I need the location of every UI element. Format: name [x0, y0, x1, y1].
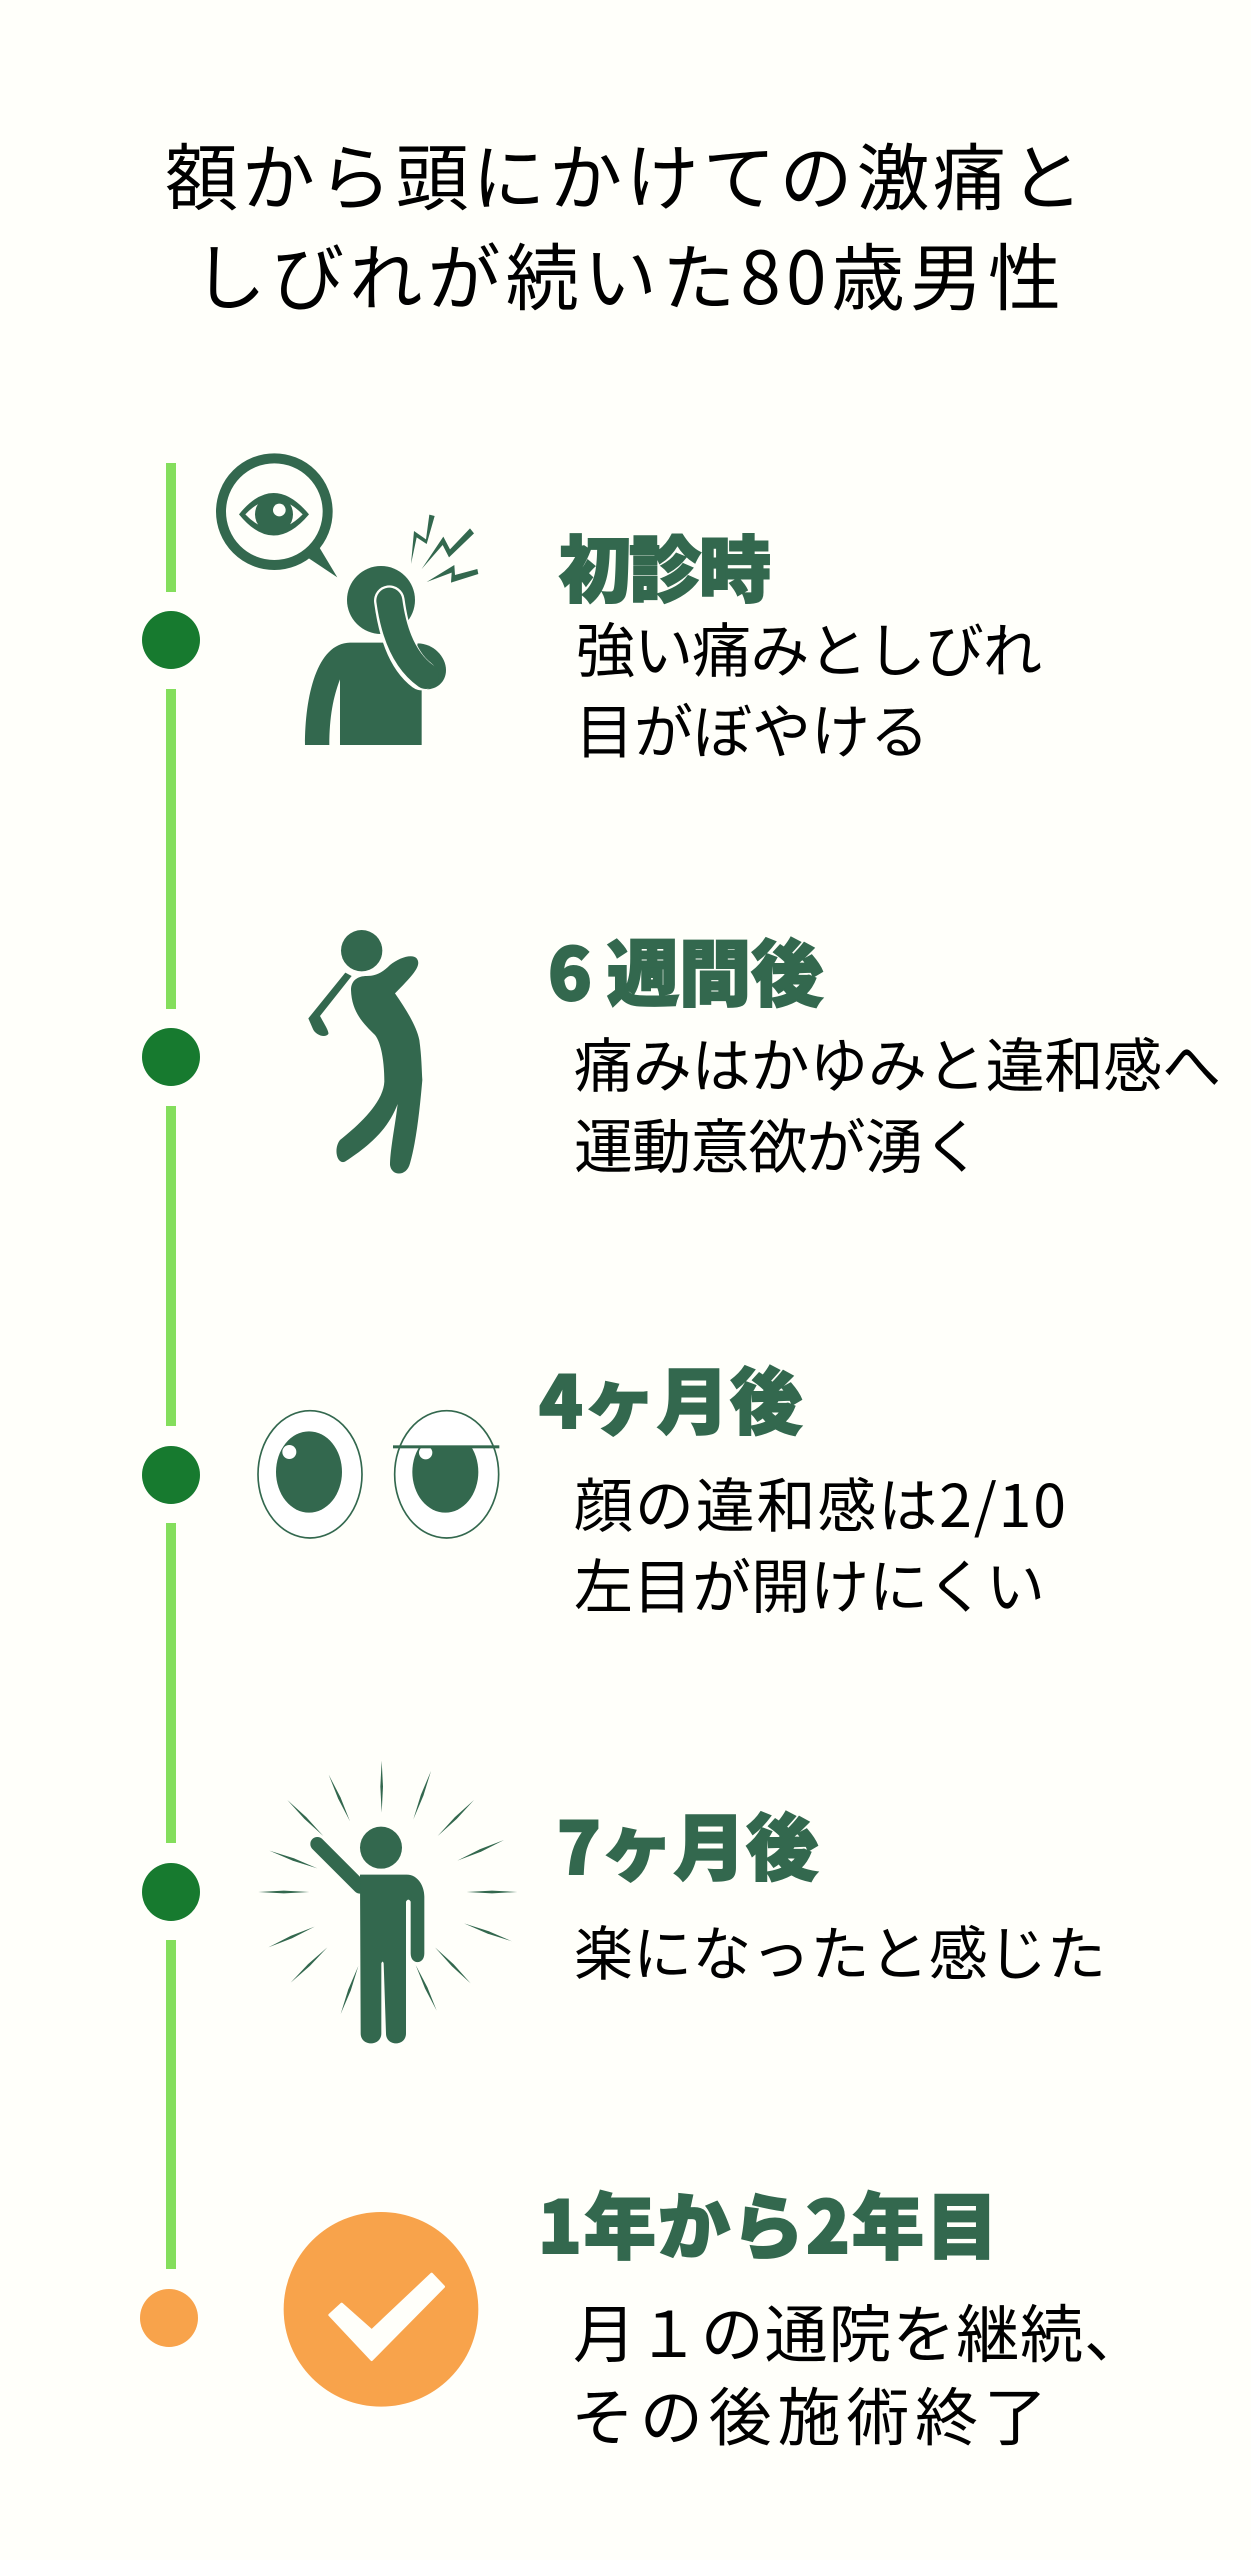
- text: 6 weeks progress: [574, 1019, 1221, 1185]
- title: しびれが続いた80歳男性: [193, 220, 1061, 326]
- text: 6 weeks progress: 運動意欲が湧く: [574, 1100, 982, 1185]
- heading: year 1 to 2: 1年から2年目: [538, 2169, 998, 2274]
- timeline: line and dots: [140, 463, 200, 2347]
- text: final treatment: その後施術終了: [571, 2368, 1047, 2459]
- text: final treatment: [571, 2285, 1147, 2459]
- text: final treatment: 月１の通院を継続、: [573, 2285, 1147, 2376]
- text: 7 months progress: 楽になったと感じた: [574, 1907, 1106, 1992]
- text: 4 months progress: 左目が開けにくい: [574, 1540, 1045, 1625]
- heading: 7 months: 7ヶ月後: [557, 1790, 818, 1895]
- heading: 4 months: 4ヶ月後: [539, 1344, 802, 1449]
- icon: orange check mark: [284, 2212, 478, 2407]
- text: first visit symptoms: [575, 604, 1042, 770]
- text: 4 months progress: [574, 1459, 1066, 1625]
- text: 4 months progress: 顔の違和感は2/10: [574, 1459, 1066, 1544]
- text: 6 weeks progress: 痛みはかゆみと違和感へ: [574, 1019, 1221, 1104]
- icon: person in pain with eye speech bubble: [221, 458, 478, 745]
- text: first visit symptoms: 目がぼやける: [575, 685, 929, 770]
- title: [165, 120, 1083, 326]
- title: 額から頭にかけての激痛と: [165, 120, 1083, 226]
- icon: golfer: [308, 930, 422, 1174]
- heading: 6 weeks: 6: [548, 916, 592, 1021]
- heading: first visit: 初診時: [559, 512, 771, 617]
- icon: person raising hand with rays: [258, 1761, 517, 2043]
- icon: two eyes, left eyelid drooping: [258, 1411, 499, 1538]
- heading: 6 weeks: 週間後: [607, 916, 823, 1021]
- text: first visit symptoms: 強い痛みとしびれ: [576, 604, 1042, 689]
